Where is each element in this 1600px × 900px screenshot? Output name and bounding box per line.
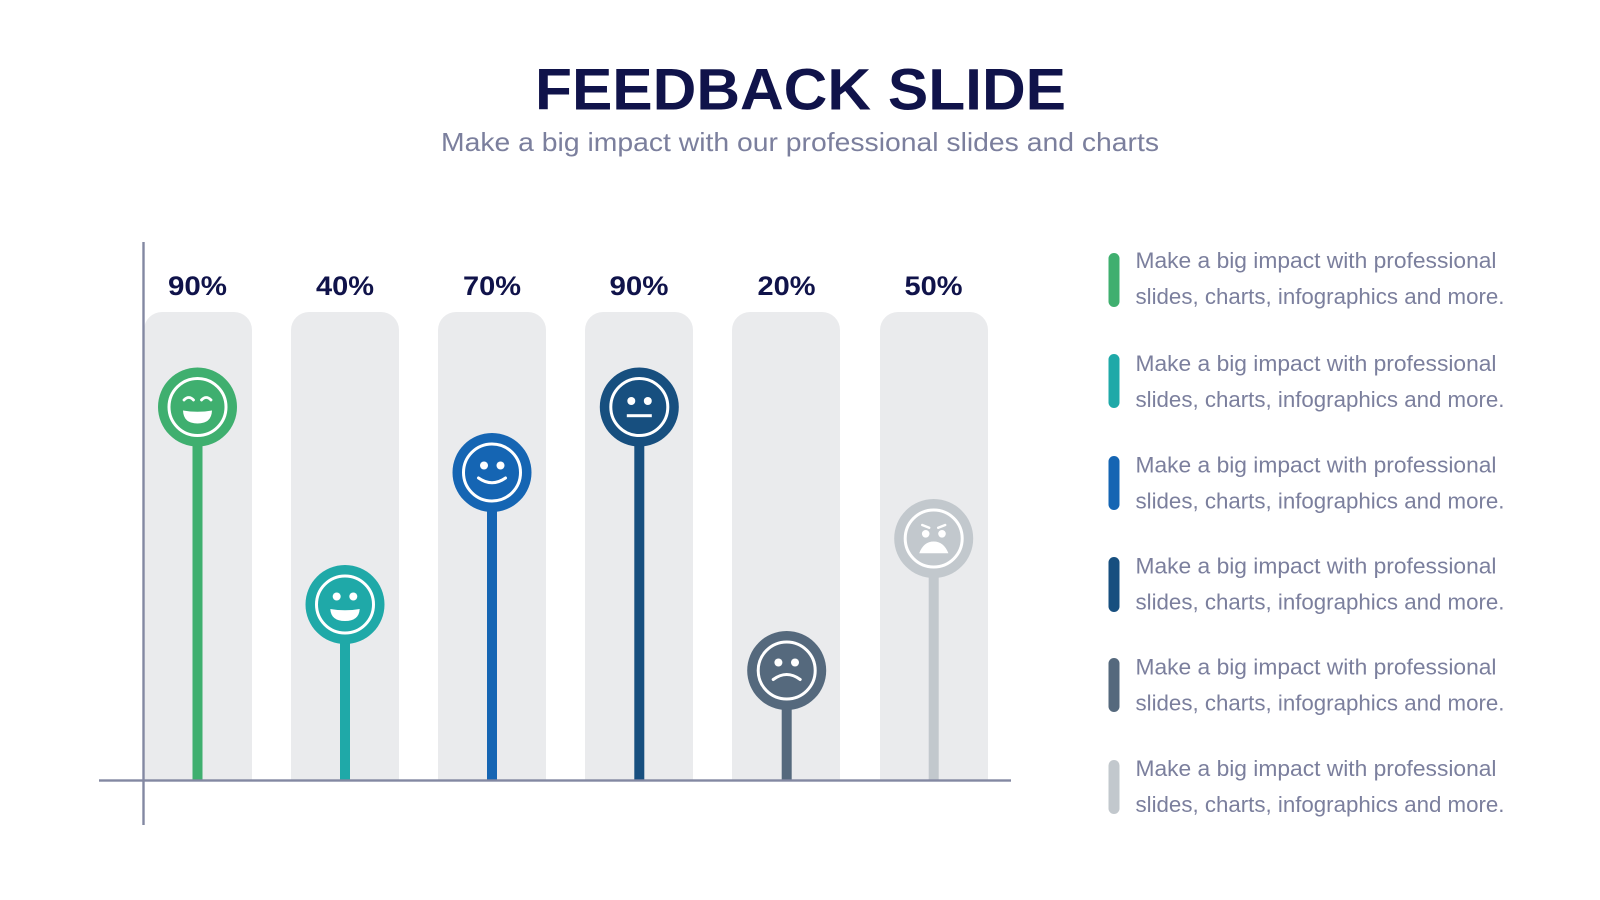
lollipop: 90% neutral face <box>600 368 679 780</box>
legend item 6 <box>1108 756 1504 817</box>
percentage labels: 50% <box>904 271 962 301</box>
legend item 4 <box>1108 554 1504 614</box>
legend item 5: Make a big impact with professional <box>1136 654 1496 680</box>
lollipop: 20% sad face <box>747 631 826 780</box>
percentage labels: 90% <box>168 271 227 301</box>
legend item 1: slides, charts, infographics and more. <box>1136 284 1504 309</box>
lollipop: 70% smile face <box>452 433 532 780</box>
legend item 1: Make a big impact with professional <box>1136 248 1496 273</box>
legend item 2: slides, charts, infographics and more. <box>1136 387 1504 412</box>
legend item 3: Make a big impact with professional <box>1136 452 1496 478</box>
percentage labels: 90% <box>610 271 668 301</box>
legend item 4: slides, charts, infographics and more. <box>1136 590 1504 614</box>
legend item 5 <box>1108 654 1504 716</box>
subtitle: Make a big impact with our professional slides and charts <box>441 127 1159 157</box>
lollipop: 40% big smile face <box>306 565 384 780</box>
legend item 3 <box>1108 452 1504 514</box>
lollipop: 50% angry face <box>894 499 973 780</box>
legend item 1 <box>1108 248 1504 309</box>
column backgrounds <box>144 312 988 780</box>
percentage labels: 20% <box>758 271 816 301</box>
legend item 2: Make a big impact with professional <box>1136 351 1496 376</box>
percentage labels <box>168 271 962 301</box>
legend item 6: Make a big impact with professional <box>1136 756 1496 781</box>
chart: feedback scores <box>99 242 1011 825</box>
legend item 4: Make a big impact with professional <box>1136 554 1496 578</box>
legend item 6: slides, charts, infographics and more. <box>1136 792 1504 817</box>
lollipop: 90% laughing face <box>158 368 237 780</box>
legend item 5: slides, charts, infographics and more. <box>1136 690 1504 716</box>
chart axes <box>99 242 1011 825</box>
percentage labels: 40% <box>316 271 374 301</box>
legend <box>1108 248 1504 817</box>
percentage labels: 70% <box>463 271 521 301</box>
legend item 3: slides, charts, infographics and more. <box>1136 488 1504 514</box>
legend item 2 <box>1108 351 1504 412</box>
title: FEEDBACK SLIDE <box>535 58 1066 122</box>
